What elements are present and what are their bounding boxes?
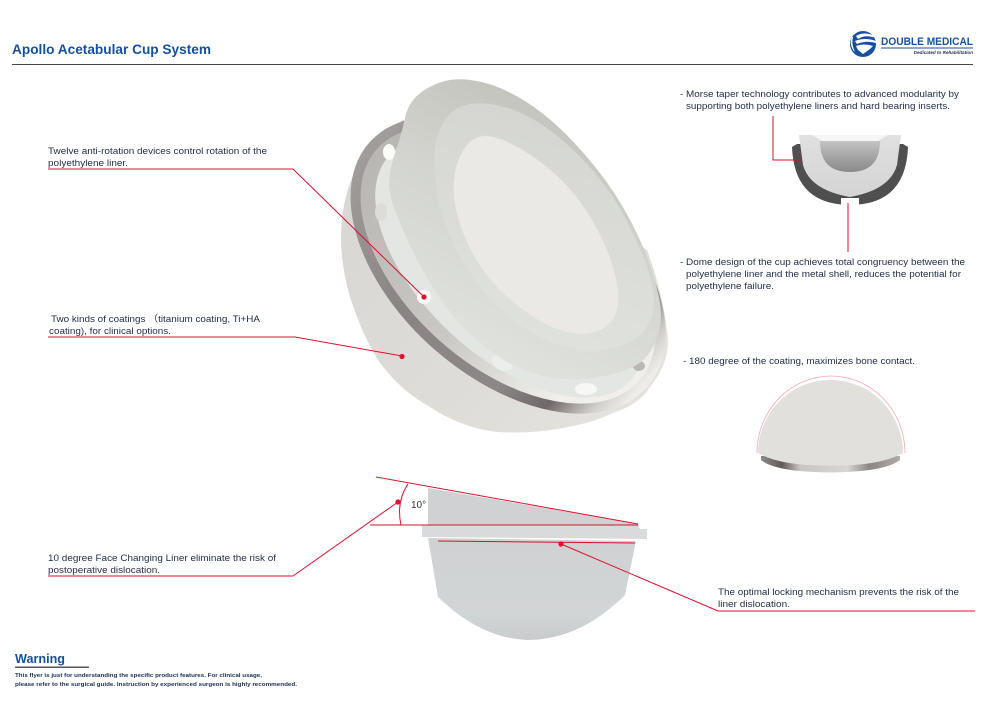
metal rim ring [302, 66, 714, 464]
outer shell with coating [341, 120, 668, 432]
metal ring [761, 456, 900, 472]
callout: anti-rotation devices: Twelve anti-rotation devices control rotation of the [48, 146, 267, 157]
text: morse taper [680, 89, 959, 112]
liner middle band [434, 103, 654, 350]
liner section [799, 135, 901, 197]
callout: locking mechanism: liner dislocation. [718, 599, 790, 610]
inner cavity [820, 141, 880, 172]
liner outer rim [389, 79, 661, 379]
red arc outline [757, 376, 905, 453]
text: dome design: - Dome design of the cup achieves total congruency between the [680, 257, 965, 268]
warning: please refer to the surgical guide. Instruction by experienced surgeon is highly recommended. [15, 682, 298, 688]
warning: Warning [15, 652, 65, 666]
header rule [12, 64, 973, 65]
liner flange [422, 525, 647, 539]
coated dome [758, 380, 903, 466]
hemisphere illustration [757, 376, 905, 472]
main cup illustration [302, 66, 714, 464]
locking line [438, 541, 635, 543]
liner upper wedge [428, 488, 639, 527]
liner side view [370, 477, 647, 640]
callout: anti-rotation devices [48, 146, 427, 300]
leader lines [773, 116, 801, 160]
callout: coatings [48, 313, 405, 359]
logo: Double Medical [850, 31, 973, 57]
metal shell section [792, 144, 908, 204]
callout: locking mechanism [558, 541, 975, 611]
text: 180 degree coating: - 180 degree of the coating, maximizes bone contact. [683, 356, 915, 367]
text: dome design [680, 257, 965, 292]
liner body and anti-rotation lobes [329, 91, 691, 445]
callout: coatings: coating), for clinical options. [49, 326, 171, 337]
liner lower body [428, 538, 636, 640]
callout: anti-rotation devices: polyethylene liner. [48, 158, 128, 169]
text: morse taper: supporting both polyethylene liners and hard bearing inserts. [686, 101, 950, 112]
title: Apollo Acetabular Cup System [12, 41, 211, 57]
liner inner face [454, 136, 618, 334]
callout: 10 degree liner: 10 degree Face Changing Liner eliminate the risk of [48, 553, 276, 564]
callout: locking mechanism: The optimal locking mechanism prevents the risk of the [718, 587, 959, 598]
section view of cup [773, 116, 908, 252]
logo: Double Medical: Dedicated to Rehabilitation [914, 50, 973, 55]
10 degree label: 10° [411, 500, 426, 511]
angle lines [370, 477, 638, 525]
logo: Double Medical: DOUBLE MEDICAL [881, 36, 973, 48]
text: dome design: polyethylene failure. [686, 281, 774, 292]
warning: This flyer is just for understanding the specific product features. For clinical usage, [15, 673, 263, 679]
callout: coatings: Two kinds of coatings （titanium coating, Ti+HA [51, 313, 261, 325]
warning [15, 652, 298, 688]
text: dome design: polyethylene liner and the metal shell, reduces the potential for [686, 269, 962, 280]
callout: 10 degree liner [48, 499, 401, 576]
text: morse taper: - Morse taper technology contributes to advanced modularity by [680, 89, 959, 100]
callout: 10 degree liner: postoperative dislocation. [48, 565, 160, 576]
